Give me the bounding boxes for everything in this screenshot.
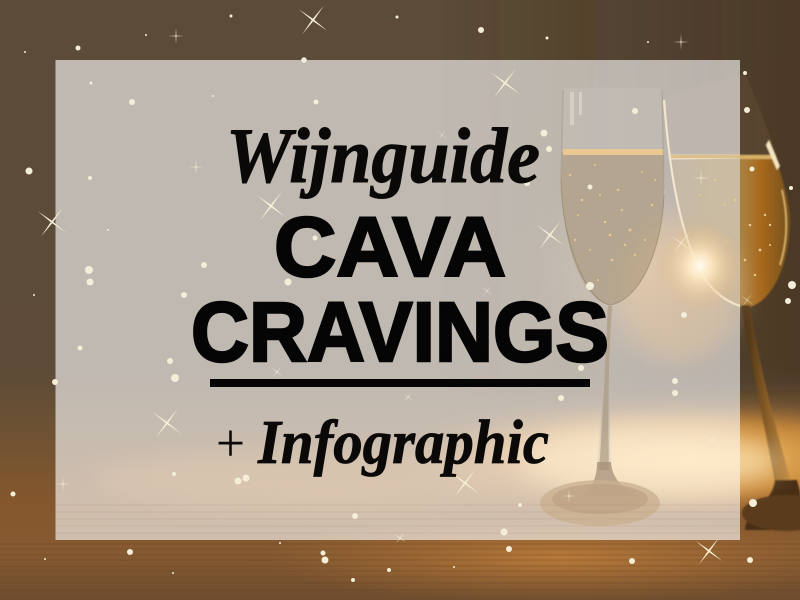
faded glass detail seen through the panel [56, 90, 780, 533]
underline rule [210, 379, 590, 387]
heading: CRAVINGS: CRAVINGS [191, 285, 609, 379]
bubbles inside the glasses [569, 164, 771, 281]
photo: right champagne glass [664, 73, 800, 531]
subtitle: plus sign: + [216, 413, 245, 473]
photo: left champagne glass [561, 88, 665, 470]
subtitle: Infographic: Infographic [257, 409, 549, 477]
title: Wijnguide: Wijnguide [226, 112, 540, 199]
heading: CAVA: CAVA [274, 200, 506, 294]
translucent panel [56, 60, 740, 540]
